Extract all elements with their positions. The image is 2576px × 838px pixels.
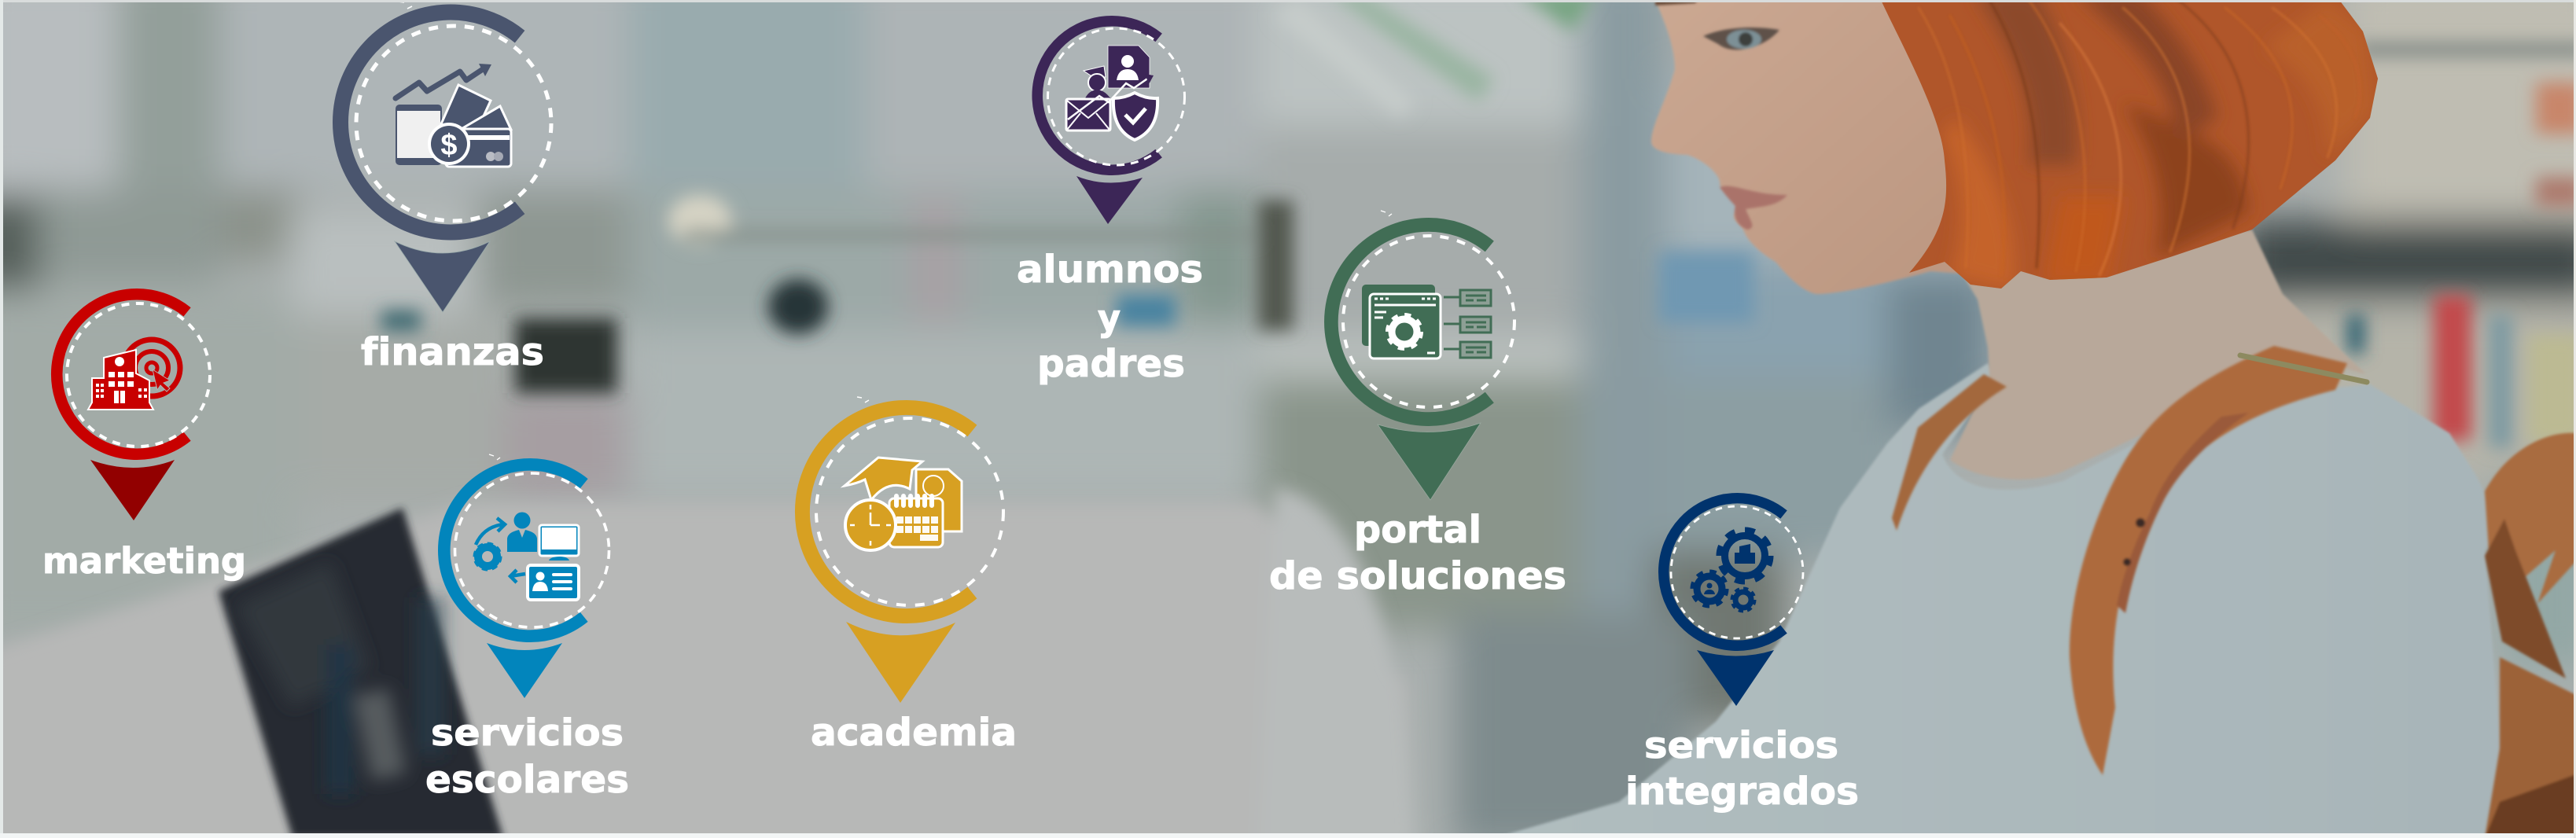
icon: student, document, mail and shield xyxy=(1066,46,1157,140)
dashed circle xyxy=(67,303,210,447)
pin: portal de soluciones xyxy=(1269,211,1566,598)
icon: windows, gear and nodes xyxy=(1362,285,1491,358)
pin: servicios escolares: escolares xyxy=(425,758,629,802)
woman: face xyxy=(1651,0,1982,294)
pointer xyxy=(1697,650,1774,706)
woman: left strap xyxy=(1892,374,2007,531)
woman: strap buckle xyxy=(2240,355,2367,382)
icon: staff, gear, monitor and id card xyxy=(475,513,579,600)
pin: academia xyxy=(802,397,1017,755)
woman: backpack xyxy=(2485,433,2576,838)
pointer xyxy=(1076,176,1143,224)
ring xyxy=(1037,21,1159,170)
label: alumnos xyxy=(1017,248,1203,292)
pin: portal de soluciones: de soluciones xyxy=(1269,554,1566,598)
dashed circle xyxy=(356,26,551,221)
pin: servicios integrados: integrados xyxy=(1625,770,1859,814)
pin: alumnos y padres xyxy=(1017,21,1203,386)
label: academia xyxy=(811,711,1017,755)
ring xyxy=(1664,498,1784,645)
ring xyxy=(1331,225,1489,419)
ring xyxy=(802,407,972,616)
label: servicios xyxy=(1644,724,1838,766)
ring xyxy=(340,13,520,233)
pin: servicios integrados xyxy=(1625,498,1859,814)
label: finanzas xyxy=(361,330,544,374)
label: marketing xyxy=(42,540,246,582)
label: portal xyxy=(1354,508,1481,552)
pointer xyxy=(1378,423,1481,500)
icon: cap, document, calendar and clock xyxy=(845,458,962,550)
woman: eye and brow xyxy=(1655,0,1779,50)
pin: alumnos y padres: y xyxy=(1098,297,1121,339)
table surface xyxy=(0,487,1415,838)
dashed circle xyxy=(1047,28,1184,165)
dashed circle xyxy=(454,473,609,627)
woman: red hair xyxy=(1871,0,2390,291)
woman: lips xyxy=(1720,186,1787,230)
laptop xyxy=(219,508,503,838)
icon: money, tablet and card: $ xyxy=(440,129,458,162)
pointer xyxy=(395,241,490,312)
pin: servicios escolares xyxy=(425,454,629,802)
icon: money, tablet and card xyxy=(396,64,511,167)
dashed circle xyxy=(1343,236,1514,407)
woman: neck xyxy=(1950,230,2366,480)
pin: finanzas xyxy=(340,2,551,374)
woman: shoulder and shirt xyxy=(1494,363,2500,838)
woman: right strap xyxy=(2070,346,2347,775)
dashed circle xyxy=(1671,506,1803,638)
label: servicios xyxy=(431,711,624,754)
ring xyxy=(57,294,187,454)
ring xyxy=(444,465,584,636)
icon: gears xyxy=(1693,531,1770,611)
dashed circle xyxy=(816,418,1003,605)
pointer xyxy=(90,460,175,520)
icon: school and target xyxy=(88,340,180,410)
pointer xyxy=(487,643,562,698)
pin: marketing xyxy=(42,294,246,582)
pointer xyxy=(846,622,955,703)
pin: alumnos y padres: padres xyxy=(1037,342,1185,386)
